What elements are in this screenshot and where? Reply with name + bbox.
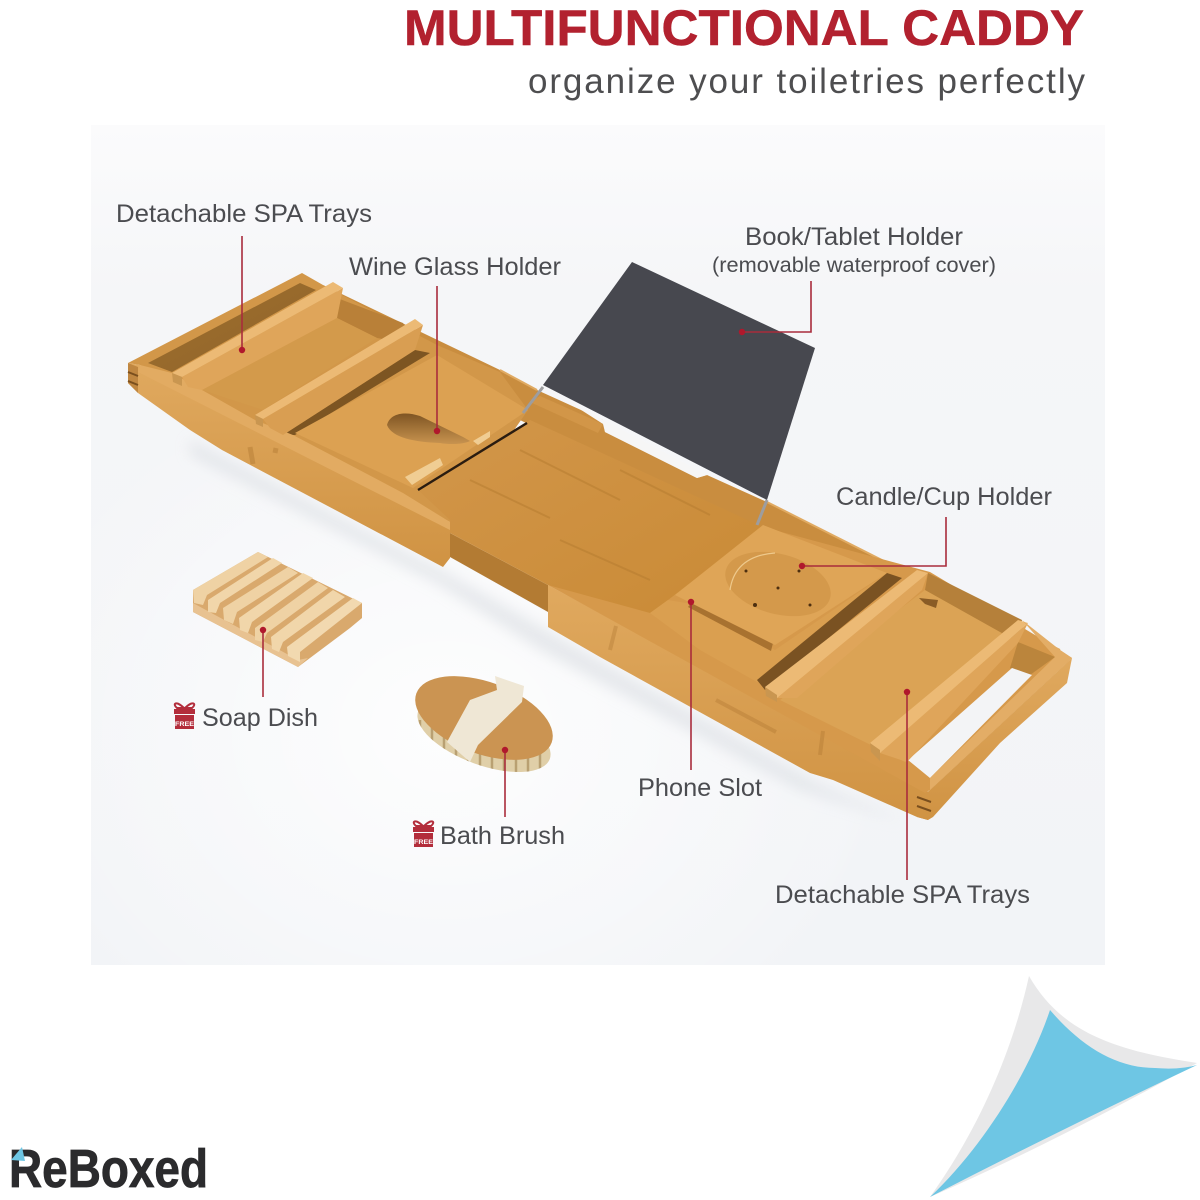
left tray rails [182,288,343,390]
page curl corner [930,976,1197,1197]
label: Bath Brush with free gift icon [413,747,565,850]
wine glass block [295,355,528,488]
ReBoxed logo: ReBoxed [9,1139,208,1199]
icon: free gift: FREE [175,721,195,728]
label: Detachable SPA Trays (right): Detachable SPA Trays [775,881,1030,909]
label: Detachable SPA Trays (right) [775,689,1030,909]
candle block [675,525,887,645]
back rail and book block [323,285,1060,660]
right tray [780,590,1002,762]
book holder cover [523,262,815,525]
right end rim [930,620,1072,790]
soft shadow under caddy [190,440,905,822]
label: Wine Glass Holder [349,253,561,434]
icon: free gift [413,821,434,847]
label: Candle/Cup Holder: Candle/Cup Holder [836,483,1052,511]
label: Book/Tablet Holder [712,223,996,335]
label: Detachable SPA Trays (left): Detachable SPA Trays [116,200,372,228]
subtitle: organize your toiletries perfectly [528,62,1086,101]
phone platform [650,573,887,682]
icon: free gift [174,703,195,729]
label: Detachable SPA Trays (left) [116,200,372,353]
phone slot [688,602,773,651]
label: Book/Tablet Holder: Book/Tablet Holder [745,223,963,251]
label: Soap Dish with free gift icon [174,627,318,732]
photo background panel [91,125,1105,965]
bath brush [415,676,553,772]
label: Phone Slot [638,599,762,802]
label: Bath Brush with free gift icon: Bath Brush [440,822,565,850]
label: Soap Dish with free gift icon: Soap Dish [202,704,318,732]
label: Book/Tablet Holder: (removable waterproof cover) [712,254,996,277]
soap dish [193,552,362,667]
left section [128,273,528,567]
candle circle [718,541,838,627]
title: MULTIFUNCTIONAL CADDY [404,0,1084,56]
center board [418,420,763,620]
bamboo bath caddy [128,262,1072,822]
label: Phone Slot: Phone Slot [638,774,762,802]
label: Candle/Cup Holder [799,483,1052,569]
right section [548,525,1072,820]
label: Wine Glass Holder: Wine Glass Holder [349,253,561,281]
icon: free gift: FREE [414,839,434,846]
